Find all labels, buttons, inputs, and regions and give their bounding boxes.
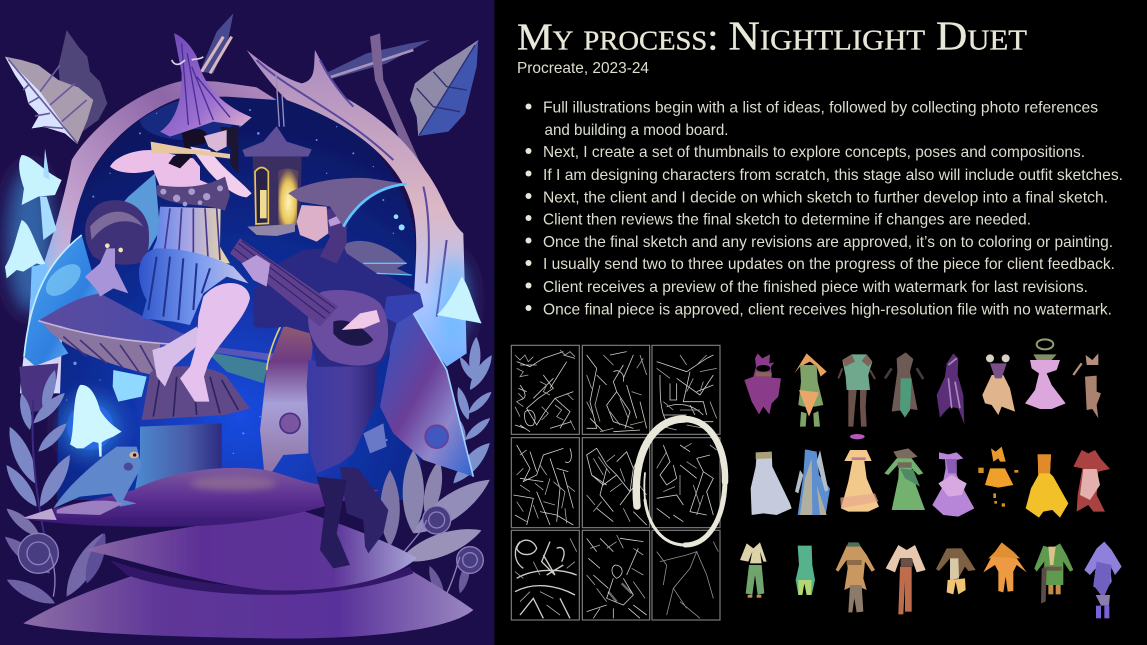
fairy leg, front (180, 283, 250, 402)
mushroom gill frill, right (207, 352, 268, 383)
fern stem, left (32, 400, 47, 547)
outfit row 1 (744, 339, 1101, 427)
pauldron (343, 241, 412, 275)
outfit: orange short (978, 447, 1018, 507)
outfit: lilac robe (1084, 542, 1122, 618)
fairy man wings (260, 310, 473, 480)
step 2: Next, I create a set of thumbnails to explore concepts, poses and compositions. (543, 144, 1085, 161)
step 6: Once the final sketch and any revisions are approved, it’s on to coloring or painting. (543, 234, 1113, 251)
step 1 (543, 100, 1098, 139)
outfit: yellow ruffled gown (840, 434, 879, 512)
tree branches, upper (200, 13, 430, 167)
tree arch, left (20, 80, 277, 393)
fern, right (380, 336, 497, 602)
glowing mushrooms, left (5, 148, 62, 310)
outfit: brown and teal (885, 352, 923, 418)
process list (526, 100, 1123, 318)
thumbnail 6 (657, 443, 717, 522)
outfit sketches (740, 339, 1122, 618)
outfit: orange striped pants (886, 545, 926, 614)
ear (328, 210, 350, 227)
outfit: green gown (884, 448, 925, 510)
outfit row 2 (751, 434, 1110, 518)
glowing mushroom, right (437, 277, 482, 323)
outfit: peach dress (982, 354, 1015, 415)
fiddlehead ferns (18, 506, 483, 597)
face (297, 205, 328, 242)
shelf fungus, bottom (23, 570, 473, 639)
thumbnail 1 (515, 350, 575, 432)
thumbnail 7 (515, 538, 577, 618)
fairy upper wing, pale blue (113, 173, 160, 253)
outfit: crimson and pink (1073, 450, 1110, 512)
thumbnail 8 (587, 535, 647, 618)
mushroom stem (135, 423, 222, 490)
boot, front (317, 477, 350, 568)
outfit: tan tunic (836, 542, 875, 612)
outfit: teal tunic (838, 354, 875, 427)
big mushroom cap (38, 293, 277, 362)
glow: left and right mushrooms (7, 167, 470, 457)
outfit: teal bodysuit (796, 546, 815, 595)
outfit: violet gown (932, 452, 974, 517)
illustration background (0, 0, 494, 645)
leaf (right) (410, 40, 478, 136)
fairy hair (168, 129, 207, 168)
flute (151, 142, 230, 159)
mushroom stem frill (142, 366, 250, 420)
lute neck (230, 238, 338, 327)
gill lines (63, 337, 157, 375)
step 7: I usually send two to three updates on the progress of the piece for client feedback. (543, 256, 1115, 273)
outfit: green and orange (794, 353, 827, 427)
fairy hair, right curls (220, 127, 238, 173)
bullet markers (526, 104, 532, 311)
hands (242, 255, 270, 287)
thumbnail sketch grid (511, 345, 720, 620)
background leaf (dark, left) (58, 30, 107, 133)
pants (307, 360, 377, 473)
outfit: purple cloak (744, 353, 781, 414)
step 3: If I am designing characters from scratch, this stage also will include outfit sketches. (543, 167, 1123, 184)
title: My process: Nightlight Duet (517, 12, 1027, 58)
step 8: Client receives a preview of the finished piece with watermark for last revisions. (543, 279, 1088, 296)
outfit: brown jacket, yellow pants (936, 548, 976, 594)
leaf (pale, left) (5, 57, 93, 144)
thumbnail 2 (587, 352, 647, 432)
boot, back (340, 467, 388, 553)
step 4: Next, the client and I decide on which sketch to further develop into a final sketch. (543, 190, 1108, 206)
mushroom rim and gills (43, 323, 160, 377)
hat (288, 178, 407, 227)
pale mushroom frills (113, 370, 147, 402)
subtitle: Procreate, 2023-24 (517, 60, 649, 77)
stem frill stripes (153, 377, 238, 417)
torso (253, 247, 423, 367)
cap rim highlight (38, 321, 207, 347)
outfit: pink dress with wreath (1025, 339, 1066, 409)
lute body (308, 290, 388, 366)
small glowing mushroom (67, 385, 122, 457)
outfit: white-blue gown (751, 452, 792, 515)
fern, left (0, 368, 111, 609)
outfit: tan two-piece (1073, 353, 1101, 418)
outfit: orange jumpsuit (983, 542, 1027, 592)
shelf fungus, top (22, 468, 380, 527)
fairy leg, back (152, 327, 203, 387)
snail (85, 200, 149, 297)
night sky (56, 96, 421, 500)
shelf fungus, middle (85, 510, 417, 591)
outfit: dark purple tatter (937, 353, 964, 424)
illustration: Nightlight Duet (0, 0, 497, 645)
hair (317, 207, 347, 263)
fairy wing, cyan (24, 235, 100, 366)
outfit: green pants (740, 542, 767, 598)
thumbnail 4 (513, 445, 575, 525)
fairy face (204, 130, 227, 152)
outfit row 3 (740, 542, 1122, 618)
step 1: Full illustrations begin with a list of ideas, followed by collecting photo references (543, 100, 1098, 116)
flower hat (160, 33, 252, 137)
circle around chosen thumbnail (636, 419, 725, 545)
fairy arm and torso (110, 150, 227, 197)
lantern (242, 73, 312, 236)
fairy man body (230, 178, 423, 568)
shadow between shelves (110, 560, 413, 595)
beads (394, 214, 405, 230)
forearm (190, 147, 252, 197)
sleeve (383, 293, 423, 323)
lower trunk shadow, left (19, 363, 58, 413)
thumbnail 3 (657, 355, 717, 430)
step 5: Client then reviews the final sketch to determine if changes are needed. (543, 212, 1031, 228)
step 1: and building a mood board. (544, 122, 728, 139)
fairy dress, bodice (147, 207, 230, 263)
tree arch, right (247, 50, 467, 367)
thumbnail 5 (587, 448, 647, 525)
thumbnail frames (511, 345, 720, 620)
outfit: yellow gown with slit (1026, 454, 1068, 518)
flower garland (157, 177, 230, 211)
frog (53, 447, 142, 515)
fairy (110, 33, 252, 402)
outfit: green tunic (1034, 543, 1073, 603)
thumbnail 9 (657, 542, 718, 618)
fairy skirt (139, 248, 248, 325)
outfit: blue gown (795, 449, 830, 515)
step 9: Once final piece is approved, client receives high-resolution file with no watermark. (543, 302, 1112, 318)
